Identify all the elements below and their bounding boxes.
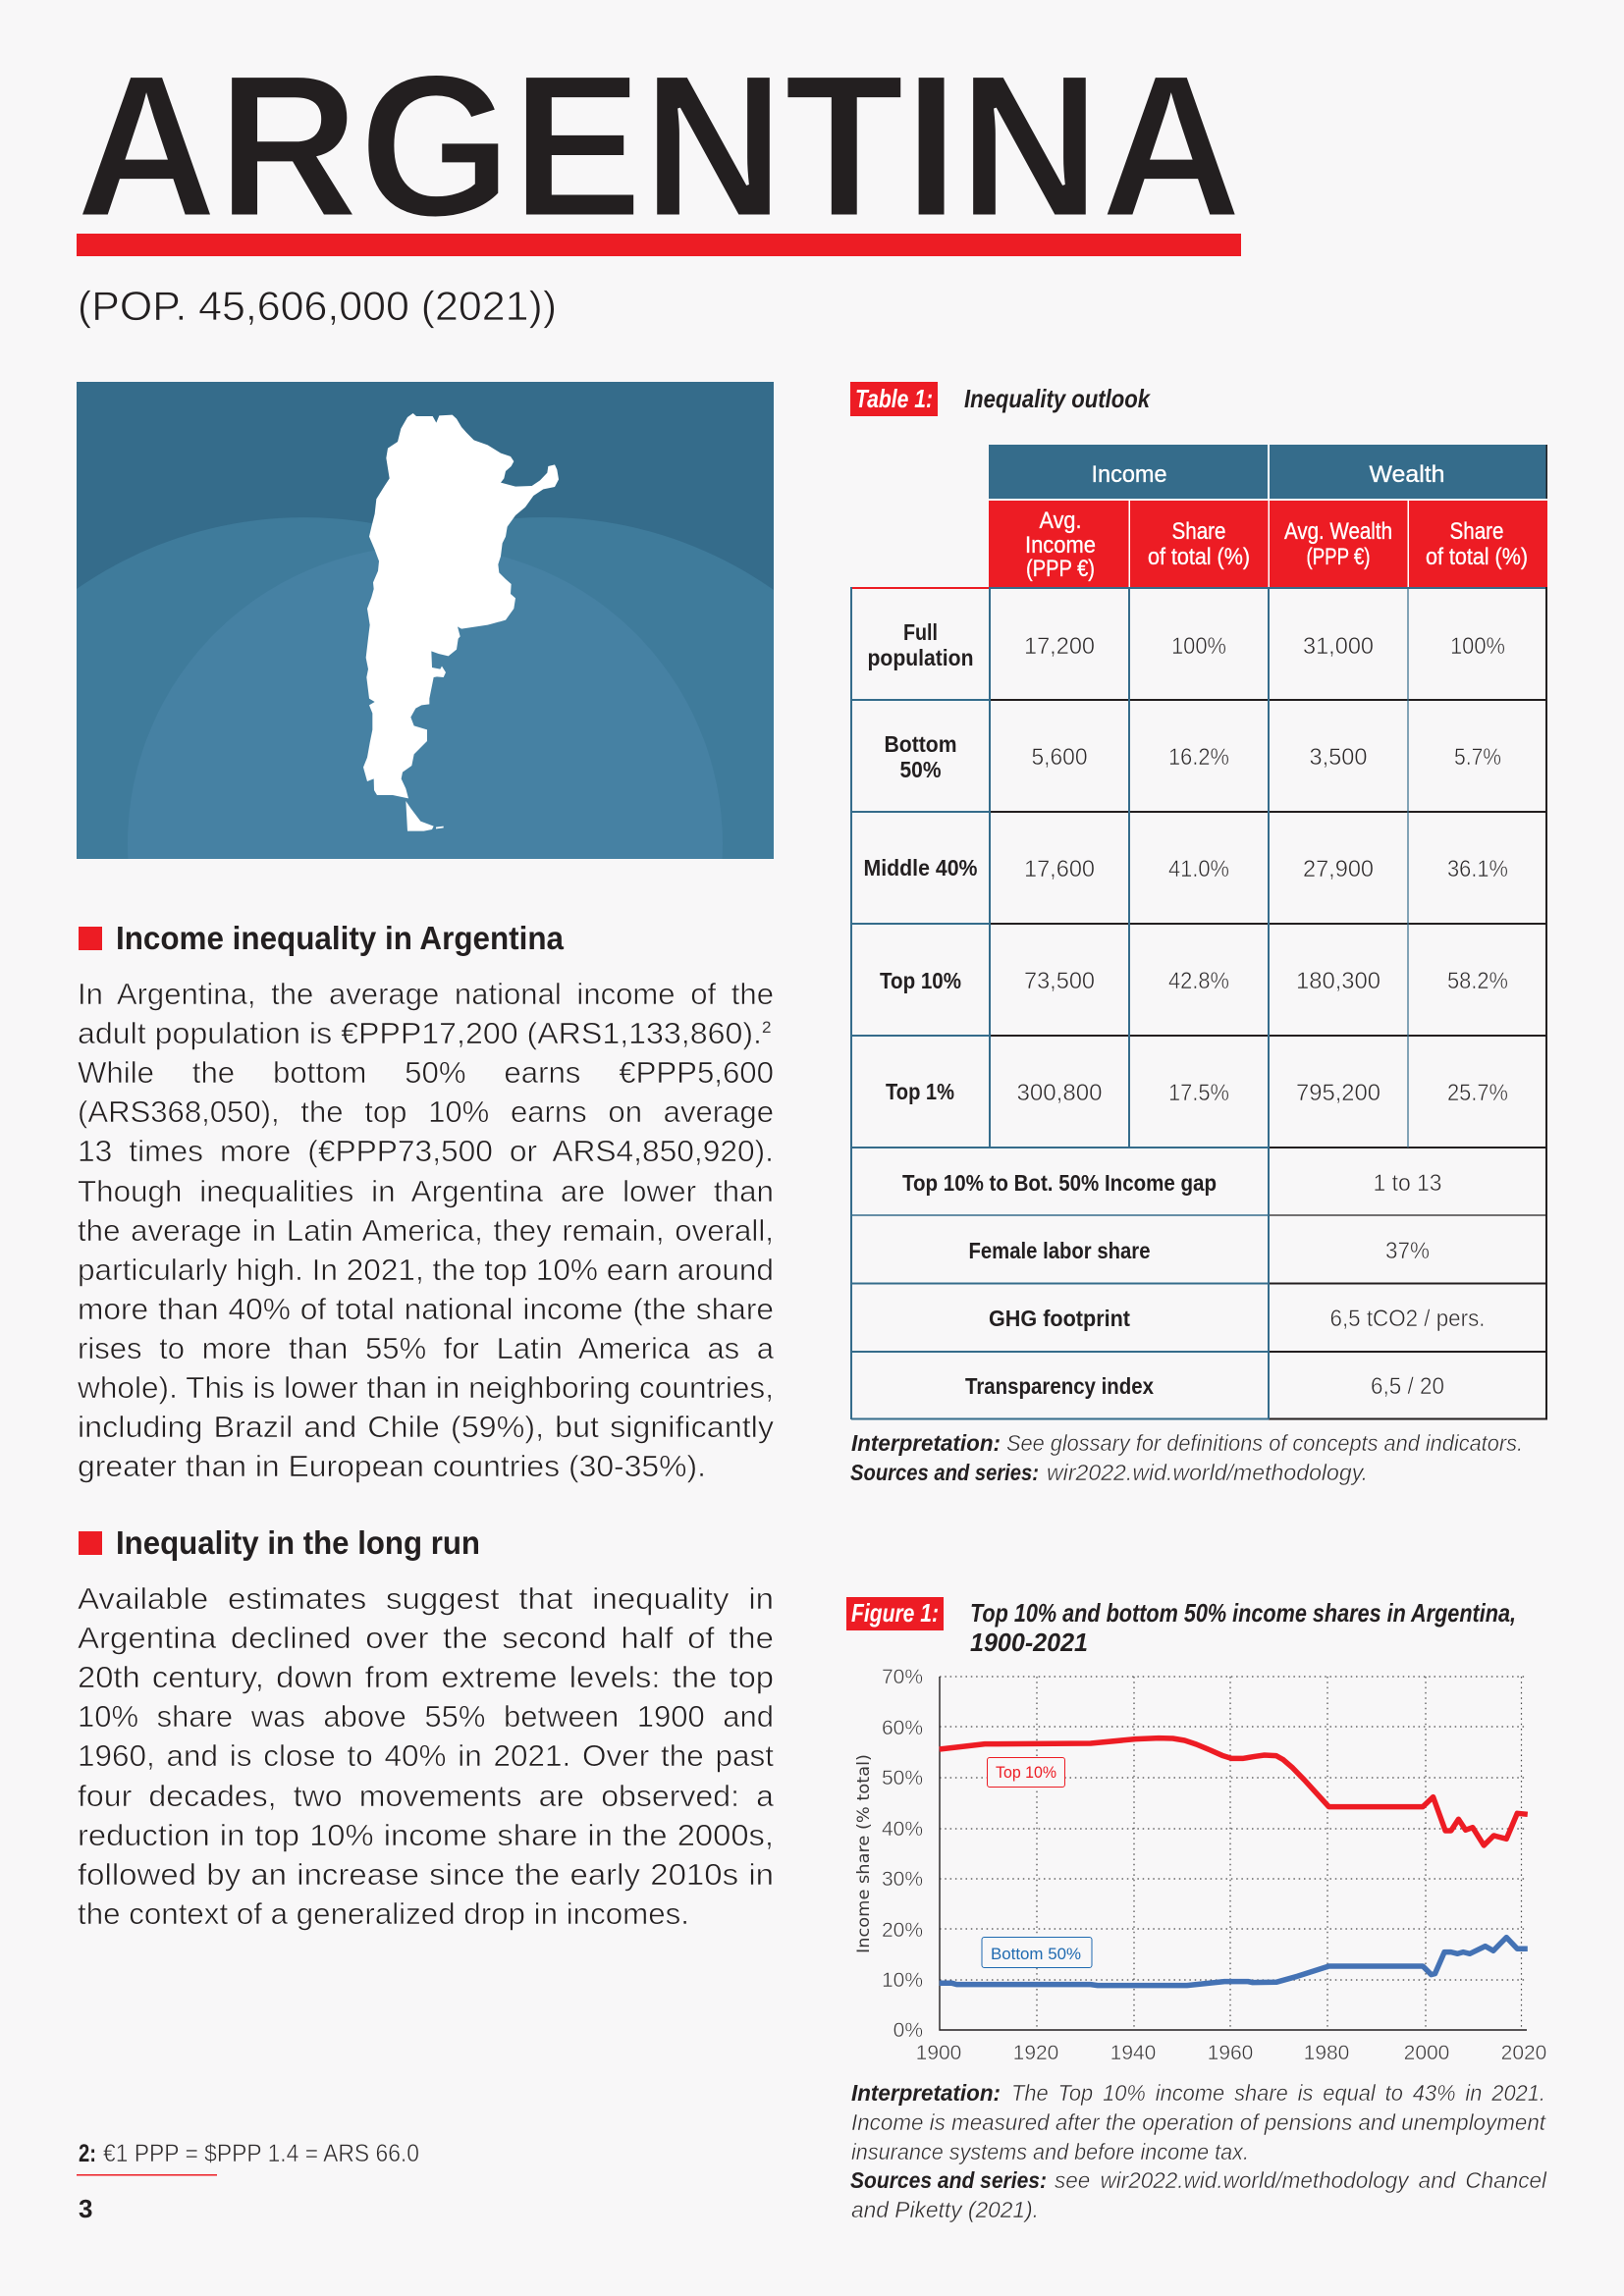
text block: income inequality: Though inequalities in Argentina are lower than (78, 1174, 774, 1208)
text block: long run: 20th century, down from extreme levels: the top (78, 1660, 774, 1694)
row: bottom 50%: 5,600 (1031, 744, 1088, 771)
table header: income and wealth: (PPP €) (1306, 544, 1371, 570)
row: top 10%: 73,500 (1024, 968, 1095, 994)
label: bottom 50% (982, 1938, 1092, 1967)
y axis labels (882, 1666, 923, 2042)
y axis title: Income share (% total) (854, 1754, 874, 1953)
table caption: Sources and series: (850, 1460, 1039, 1485)
row: income gap: 1 to 13 (1373, 1170, 1441, 1197)
line: bottom 50% (940, 1938, 1528, 1986)
table caption (850, 1430, 1523, 1485)
figure heading: Top 10% and bottom 50% income shares in Argentina, (970, 1598, 1516, 1628)
row: bottom 50%: 50% (899, 757, 941, 782)
footnote: 2: (79, 2140, 96, 2167)
x axis labels: 2000 (1404, 2042, 1449, 2064)
table grid lines (850, 587, 1547, 1419)
text block: income inequality: including Brazil and Chile (59%), but significantly (78, 1410, 775, 1444)
row: GHG footprint: 6,5 tCO2 / pers. (1329, 1306, 1485, 1332)
table caption: wir2022.wid.world/methodology. (1047, 1460, 1368, 1485)
row: female labor share: 37% (1385, 1238, 1430, 1264)
text block: income inequality: greater than in European countries (30-35%). (78, 1449, 706, 1483)
y axis labels: 30% (882, 1868, 923, 1891)
row: full population: population (868, 645, 974, 670)
text block: long run: four decades, two movements are observed: a (78, 1779, 775, 1813)
row: income gap (902, 1170, 1441, 1197)
row: middle 40%: 41.0% (1168, 856, 1229, 882)
table header: income and wealth: Wealth (1369, 461, 1445, 488)
row: GHG footprint (989, 1306, 1485, 1332)
row: middle 40% (864, 855, 1508, 882)
table header: income and wealth: Share (1449, 518, 1504, 545)
text block: long run (78, 1581, 775, 1931)
text block: income inequality: more than 40% of total national income (the share (78, 1292, 774, 1326)
row: full population (868, 619, 1505, 670)
row: full population: 100% (1450, 633, 1505, 660)
y axis labels: 20% (882, 1919, 923, 1942)
row: top 10%: 180,300 (1296, 968, 1380, 994)
table: inequality outlook (850, 445, 1547, 1419)
x axis labels: 1980 (1304, 2042, 1349, 2064)
x axis labels: 1940 (1110, 2042, 1156, 2064)
table caption: Interpretation: (851, 1430, 1001, 1456)
row: top 1%: Top 1% (886, 1079, 954, 1104)
row: bottom 50%: 3,500 (1310, 744, 1367, 771)
text block: income inequality: the average in Latin America, they remain, overall, (78, 1213, 774, 1248)
y axis labels: 40% (882, 1818, 923, 1841)
text block: income inequality: 2 (762, 1018, 771, 1037)
figure caption: Interpretation: (851, 2080, 1001, 2106)
figure caption: Sources and series: (850, 2167, 1047, 2193)
figure heading: 1900-2021 (970, 1628, 1088, 1657)
footnote (77, 2140, 419, 2175)
label: top 10% (988, 1757, 1064, 1787)
text block: income inequality: adult population is €PPP17,200 (ARS1,133,860). (78, 1016, 762, 1050)
row: bottom 50%: Bottom (884, 731, 956, 757)
row: top 10%: 42.8% (1168, 968, 1229, 994)
text block: income inequality (77, 977, 775, 1483)
y axis labels: 50% (882, 1767, 923, 1789)
row: GHG footprint: GHG footprint (989, 1306, 1130, 1331)
text block: income inequality: (ARS368,050), the top 10% earns on average (78, 1095, 774, 1129)
row: top 1%: 795,200 (1296, 1080, 1380, 1106)
table header: income and wealth: of total (%) (1426, 544, 1528, 570)
figure heading (846, 1597, 1516, 1657)
table header: income and wealth: Avg. (1039, 507, 1082, 534)
table header: income and wealth: Avg. Wealth (1284, 518, 1392, 545)
footnote: €1 PPP = $PPP 1.4 = ARS 66.0 (103, 2140, 419, 2167)
panel: map of Argentina (77, 382, 774, 859)
text block: long run: Argentina declined over the second half of the (78, 1621, 774, 1655)
label: bottom 50%: Bottom 50% (991, 1945, 1081, 1963)
y axis labels: 70% (882, 1666, 923, 1688)
x axis labels: 1920 (1013, 2042, 1058, 2064)
table header: income and wealth: Income (1025, 532, 1096, 559)
table heading: Table 1: (855, 384, 933, 413)
title: ARGENTINA (76, 32, 1242, 259)
figure caption (850, 2080, 1547, 2222)
text block: income inequality: 13 times more (€PPP73,500 or ARS4,850,920). (78, 1134, 774, 1168)
heading: income inequality: Income inequality in Argentina (116, 920, 565, 956)
text block: long run: the context of a generalized drop in incomes. (78, 1896, 689, 1931)
row: transparency index: 6,5 / 20 (1371, 1373, 1444, 1400)
row: top 1% (886, 1079, 1508, 1106)
row: top 1%: 17.5% (1168, 1080, 1229, 1106)
row: transparency index (965, 1373, 1444, 1400)
text block: long run: 1960, and is close to 40% in 2021. Over the past (78, 1738, 774, 1773)
label: top 10%: Top 10% (996, 1763, 1056, 1782)
row: bottom 50%: 16.2% (1168, 744, 1229, 771)
table caption: See glossary for definitions of concepts and indicators. (1006, 1430, 1523, 1456)
page number: 3 (79, 2194, 92, 2223)
text block: long run: Available estimates suggest that inequality in (78, 1581, 774, 1616)
row: income gap: Top 10% to Bot. 50% Income gap (902, 1170, 1217, 1196)
text block: income inequality: particularly high. In 2021, the top 10% earn around (78, 1253, 774, 1287)
row: top 1%: 300,800 (1017, 1080, 1102, 1106)
row: transparency index: Transparency index (965, 1373, 1154, 1399)
table heading (850, 382, 1151, 416)
table header: income and wealth (989, 445, 1547, 587)
figure heading: Figure 1: (851, 1598, 939, 1628)
icon: Argentina silhouette (363, 413, 559, 831)
y axis labels: 10% (882, 1969, 923, 1992)
figure caption: insurance systems and before income tax. (851, 2139, 1249, 2164)
figure caption: The Top 10% income share is equal to 43% in 2021. (1011, 2080, 1545, 2106)
row: female labor share (968, 1238, 1430, 1264)
line: top 10% (940, 1738, 1528, 1845)
table header: income and wealth: of total (%) (1148, 544, 1250, 570)
row: top 1%: 25.7% (1447, 1080, 1508, 1106)
table header: income and wealth: Income (1092, 461, 1166, 488)
figure caption: Income is measured after the operation of pensions and unemployment (851, 2109, 1547, 2135)
row: full population: 31,000 (1303, 633, 1374, 660)
table heading: Inequality outlook (964, 384, 1151, 413)
x axis labels: 1900 (916, 2042, 961, 2064)
text block: income inequality: rises to more than 55% for Latin America as a (78, 1331, 775, 1365)
text block: income inequality: In Argentina, the average national income of the (78, 977, 774, 1011)
row: top 10%: Top 10% (880, 968, 961, 993)
text block: income inequality: whole). This is lower than in neighboring countries, (77, 1370, 774, 1405)
row: top 10%: 58.2% (1447, 968, 1508, 994)
row: full population: 100% (1171, 633, 1226, 660)
x axis labels: 2020 (1501, 2042, 1546, 2064)
x axis labels (916, 2042, 1546, 2064)
heading: long run: Inequality in the long run (116, 1524, 480, 1561)
text block: long run: 10% share was above 55% between 1900 and (78, 1699, 774, 1734)
figure caption: and Piketty (2021). (851, 2197, 1039, 2222)
row: bottom 50%: 5.7% (1454, 744, 1501, 771)
subtitle: population: (POP. 45,606,000 (2021)) (78, 283, 557, 329)
text block: long run: reduction in top 10% income share in the 2000s, (78, 1818, 774, 1852)
x axis labels: 1960 (1208, 2042, 1253, 2064)
line chart: income shares (854, 1666, 1546, 2064)
row: female labor share: Female labor share (968, 1238, 1151, 1263)
row: full population: 17,200 (1024, 633, 1095, 660)
row: middle 40%: 27,900 (1303, 856, 1374, 882)
row: middle 40%: 36.1% (1447, 856, 1508, 882)
y axis labels: 0% (893, 2019, 923, 2042)
y axis labels: 60% (882, 1717, 923, 1739)
text block: long run: followed by an increase since the early 2010s in (78, 1857, 774, 1892)
row: bottom 50% (884, 731, 1501, 782)
row: middle 40%: 17,600 (1024, 856, 1095, 882)
table header: income and wealth: Share (1172, 518, 1225, 545)
row: full population: Full (903, 619, 938, 645)
text block: income inequality: While the bottom 50% earns €PPP5,600 (78, 1055, 774, 1090)
table header: income and wealth: (PPP €) (1026, 556, 1095, 582)
figure caption: see wir2022.wid.world/methodology and Chancel (1055, 2167, 1547, 2193)
row: top 10% (880, 968, 1508, 994)
row: middle 40%: Middle 40% (864, 855, 978, 881)
